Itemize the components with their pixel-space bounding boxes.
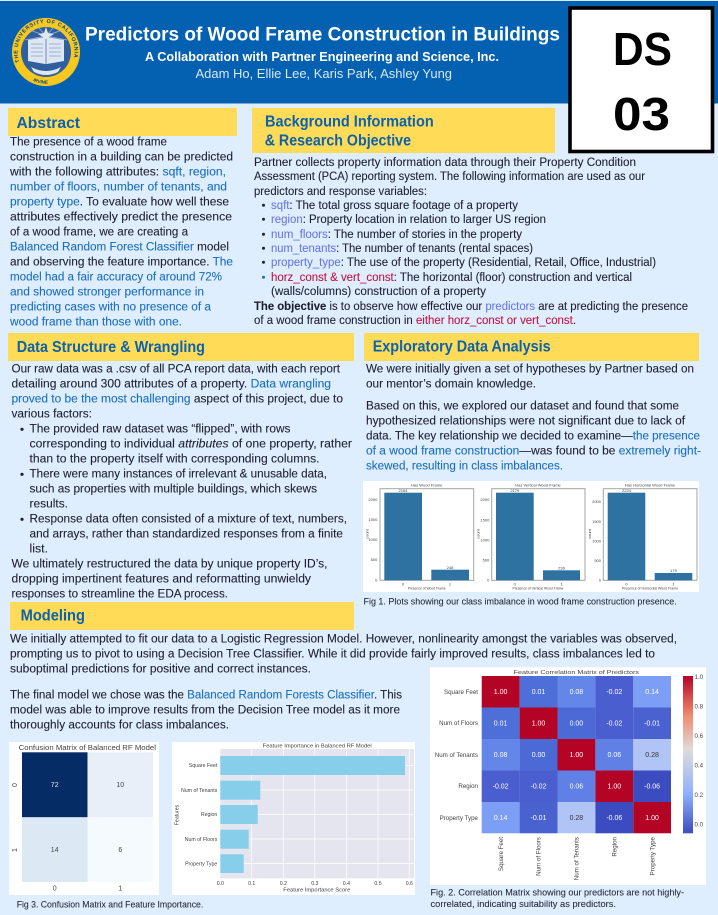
abstract text: number of floors, number of tenants, and [10,180,227,194]
chart: confusion matrix: 10 [116,782,124,789]
caption: figure 2 [430,888,684,909]
heatmap colorbar: 0.0 [694,822,704,828]
heatmap values: -0.02 [606,689,622,696]
chart: feature importance: Property Type [185,862,217,868]
abstract text: and showed stronger performance in [10,285,204,299]
bar chart: has horizontal wood frame: 500 [594,558,602,563]
wrangling text: various factors: [12,407,92,421]
bar chart: has vertical wood frame: 0 [514,582,517,586]
abstract text: construction in a building can be predicted [10,150,233,164]
modeling text: model was able to improve results from the Decision Tree model as it more [10,702,400,716]
bar chart: has wood frame: Has Wood Frame [411,482,443,488]
heatmap row labels: Region [458,783,479,790]
eda text: our mentor’s domain knowledge. [366,377,536,391]
heatmap values: 0.08 [494,752,508,759]
caption: figure 2: Fig. 2. Correlation Matrix showing our predictors are not highly- [430,888,684,898]
chart: feature importance: Feature Importance in Balanced RF Model [263,744,372,750]
variable list: sqft: The total gross square footage of a property [271,198,519,212]
authors: Adam Ho, Ellie Lee, Karis Park, Ashley Yung [196,66,452,81]
heatmap column labels: Num of Floors [536,837,543,876]
variable list [262,198,656,298]
bar chart: has wood frame: 1000 [368,537,378,542]
wrangling text: Our raw data was a .csv of all PCA report data, with each report [12,362,341,376]
abstract text: predicting cases with no presence of a [10,300,211,314]
eda text: hypothesized relationships were not significant due to lack of [366,414,686,428]
wrangling text: than to the property itself with corresponding columns. [30,452,320,466]
heatmap column labels: Region [612,836,618,857]
heading: background: Background Information [265,114,434,131]
subtitle: A Collaboration with Partner Engineering and Science, Inc. [145,50,499,64]
chart: confusion matrix: 14 [51,847,59,854]
wrangling text: detailing around 300 attributes of a property. Data wrangling [12,377,331,391]
heatmap cells [482,676,671,833]
panel: data structure and wrangling [8,333,354,601]
wrangling text: The provided raw dataset was “flipped”, with rows [30,422,290,436]
bar chart: has horizontal wood frame: count [587,528,592,539]
icon: university seal: THE UNIVERSITY OF CALIFORNIA [14,19,78,64]
heatmap colorbar: 0.4 [694,762,704,770]
heading: abstract: Abstract [16,115,81,132]
variable list: (walls/columns) construction of a property [271,284,487,298]
modeling text: We initially attempted to fit our data to a Logistic Regression Model. However, nonlinearity amongst the variables was observed, [10,632,677,646]
wrangling text: results. [30,497,68,511]
bar chart: has horizontal wood frame: 2000 [592,499,602,504]
heatmap values: 1.00 [645,815,659,822]
heatmap row labels: Square Feet [444,689,478,696]
heatmap row labels [435,689,479,822]
chart: confusion matrix: 1 [118,886,122,892]
chart: confusion matrix: 1 [12,848,19,852]
heatmap values: 1.00 [532,721,545,728]
eda text: skewed, resulting in class imbalances. [366,458,563,472]
bar chart: has horizontal wood frame: 0 [599,578,602,582]
heatmap column labels: Num of Tenants [574,837,581,880]
bar chart: has horizontal wood frame: 179 [670,568,678,573]
heatmap values: 0.01 [494,721,508,728]
chart: feature importance: Num of Floors [185,837,218,843]
wrangling text [12,362,352,601]
bar chart: has vertical wood frame: 236 [558,566,566,570]
bar chart: has horizontal wood frame: 1500 [592,519,602,524]
wrangling text: such as properties with multiple buildings, which skews [30,482,317,496]
wrangling text: dropping impertinent features and reformatting unwieldy [12,572,312,586]
panel: exploratory data analysis [363,333,701,606]
panel: background information [252,108,688,327]
heatmap colorbar: 0.6 [694,733,704,740]
eda text: data. The key relationship we decided to examine—the presence [366,428,700,442]
bar chart: has horizontal wood frame: 0 [625,582,628,586]
bar chart: has wood frame [364,482,474,590]
wrangling text: We ultimately restructured the data by unique property ID’s, [12,557,328,571]
bar chart: has vertical wood frame: Presence of Vertical Wood Frame [512,586,564,590]
bar chart: has horizontal wood frame: 2224 [622,488,632,493]
modeling text [10,632,677,731]
chart: feature importance: 0.1 [248,881,255,887]
objective statement [254,299,688,327]
chart: confusion matrix: Confusion Matrix of Balanced RF Model [19,745,156,752]
chart: feature importance: Num of Tenants [181,788,218,794]
bar chart: has vertical wood frame: 2179 [510,488,520,493]
heatmap values: -0.06 [606,815,622,822]
icon: university seal: IRVINE [33,78,48,84]
chart: confusion matrix: 0 [12,783,19,787]
chart: feature importance: Square Feet [189,763,218,769]
background intro text: Partner collects property information data through their Property Condition [254,155,636,169]
abstract text: property type. To evaluate how well these [10,195,229,209]
heading: modeling: Modeling [21,608,85,625]
heatmap values: -0.02 [606,721,622,728]
background intro text: Assessment (PCA) reporting system. The following information are used as our [254,169,645,183]
bar chart: has horizontal wood frame: Presence of Horizontal Wood Frame [622,586,679,590]
abstract text: of a wood frame, we are creating a [10,225,188,239]
heading: eda [364,333,699,361]
heading: data structure [8,333,354,361]
bar chart: has horizontal wood frame [587,482,697,590]
heading: background: & Research Objective [265,133,411,150]
heatmap column labels: Square Feet [498,837,505,871]
heatmap values: 0.08 [570,689,583,696]
heatmap values: 0.14 [645,689,659,696]
chart: confusion matrix: 0 [53,886,57,892]
wrangling text: proved to be the most challenging aspect of this project, due to [12,392,343,406]
wrangling text: and arrays, rather than standardized responses from a finite [30,527,343,541]
wrangling text: There were many instances of irrelevant & unusable data, [30,467,327,481]
variable list: property_type: The use of the property (Residential, Retail, Office, Industrial) [271,255,656,269]
title: Predictors of Wood Frame Construction in Buildings [85,24,560,46]
chart: feature importance: 0.6 [406,881,413,887]
bar chart: has wood frame: 2000 [368,497,378,502]
heatmap values: 1.00 [494,689,508,696]
heatmap row labels: Property Type [440,815,479,822]
bar chart: has horizontal wood frame: 1 [672,582,675,586]
variable list: num_tenants: The number of tenants (rental spaces) [271,241,533,255]
chart: feature importance: Feature Importance Score [283,888,350,894]
variable list: num_floors: The number of stories in the property [271,227,523,241]
wrangling text: responses to streamline the EDA process. [12,587,228,601]
chart: feature importance: Features [174,804,180,825]
objective statement: of a wood frame construction in either horz_const or vert_const. [254,313,576,327]
bar chart: has wood frame: count [364,528,370,539]
abstract text: The presence of a wood frame [10,135,167,149]
eda text: We were initially given a set of hypotheses by Partner based on [366,362,694,376]
chart: feature importance: 0.2 [280,881,287,887]
abstract text [9,135,233,329]
modeling text: suboptimal predictions for positive and correct instances. [10,662,311,676]
bar chart: has horizontal wood frame: 1000 [592,538,602,544]
team badge: DS [613,23,672,75]
chart: feature importance: 0.4 [343,881,350,887]
caption: figure 1: Fig 1. Plots showing our class imbalance in wood frame construction presence. [364,596,677,606]
heatmap row labels: Num of Floors [439,720,478,727]
bar chart: has vertical wood frame: 1000 [480,538,490,542]
header banner [0,1,718,104]
bar chart: has wood frame: 0 [402,582,405,586]
heatmap colorbar: 0.2 [694,792,704,799]
bar chart: has wood frame: Presence of Wood Frame [408,586,446,590]
chart: feature importance: Region [201,812,217,818]
objective statement: The objective is to observe how effective our predictors are at predicting the presence [254,299,688,313]
heading: background [252,108,555,153]
heatmap column labels: Property Type [649,836,656,875]
heatmap column labels [498,836,656,880]
chart: confusion matrix: 72 [51,782,59,789]
heatmap values: -0.02 [493,784,509,791]
bar chart: has wood frame: 500 [371,557,378,562]
chart: correlation matrix heatmap: Feature Correlation Matrix of Predictors [514,670,639,676]
bar chart: has wood frame: 1 [449,582,452,586]
heatmap values: -0.01 [644,721,660,728]
team badge [570,8,712,152]
chart: class imbalance bar plots [363,481,699,592]
abstract text: model had a fair accuracy of around 72% [10,270,222,284]
eda text: Based on this, we explored our dataset and found that some [366,398,679,412]
heatmap values: 0.28 [645,752,659,759]
bar chart: has vertical wood frame: 1500 [480,518,490,522]
heatmap values: 0.00 [532,752,545,759]
modeling text: prompting us to pivot to using a Decision Tree Classifier. While it did provide fairly improved results, class imbalances led to [10,647,655,661]
heading: modeling [10,602,354,630]
heatmap values: 0.01 [532,689,545,696]
heading: eda: Exploratory Data Analysis [373,339,551,356]
abstract text: attributes effectively predict the presence [10,210,232,224]
variable list: region: Property location in relation to larger US region [271,212,546,226]
modeling text: The final model we chose was the Balanced Random Forests Classifier. This [10,687,402,701]
bar chart: has vertical wood frame [476,482,585,590]
heatmap values: -0.02 [531,784,547,791]
team badge: 03 [613,88,670,140]
variable list: horz_const & vert_const: The horizontal (floor) construction and vertical [271,270,632,284]
heatmap values: 1.00 [570,752,583,759]
wrangling text: list. [30,542,48,556]
bar chart: has horizontal wood frame: Has Horizontal Wood Frame [625,482,676,488]
heatmap values [493,689,660,822]
caption: figure 2: correlated, indicating suitability as predictors. [430,899,616,909]
abstract text: with the following attributes: sqft, region, [9,165,226,179]
chart: feature importance: 0.5 [374,881,382,887]
bar chart: has vertical wood frame: count [476,528,480,539]
heatmap values: 0.06 [570,784,583,791]
panel: abstract [8,108,237,329]
chart: confusion matrix [9,742,159,895]
bar chart: has wood frame: 2164 [399,488,408,493]
background intro text: predictors and response variables: [254,184,427,198]
modeling text: thoroughly accounts for class imbalances. [10,717,229,731]
abstract text: Balanced Random Forest Classifier model [10,240,229,254]
bar chart: has vertical wood frame: 2000 [480,497,490,502]
icon: university seal [12,18,80,86]
bar chart: has wood frame: 0 [375,578,378,582]
background intro text [254,155,645,198]
wrangling text: corresponding to individual attributes of one property, rather [30,437,352,451]
heatmap values: 1.00 [607,784,621,791]
bar chart: has wood frame: 1500 [368,517,378,522]
heatmap values: 0.00 [570,721,583,728]
heatmap values: 0.28 [570,815,583,822]
heatmap values: -0.01 [531,815,547,822]
caption: figure 3: Fig 3. Confusion Matrix and Feature Importance. [17,900,203,910]
chart: feature importance: 0.3 [311,881,319,887]
heatmap colorbar: 1.0 [694,674,704,681]
heatmap values: 0.14 [494,815,508,822]
heading: abstract [8,108,237,136]
abstract text: wood frame than those with one. [9,315,182,329]
heatmap colorbar: 0.8 [694,704,704,710]
heading: data structure: Data Structure & Wrangling [17,339,205,356]
abstract text: and observing the feature importance. The [10,255,233,269]
chart: confusion matrix: 6 [118,847,122,854]
heatmap colorbar [683,674,704,833]
bar chart: has vertical wood frame: 1 [560,582,563,586]
panel: modeling [9,602,706,910]
heatmap values: -0.06 [644,784,660,791]
heatmap row labels: Num of Tenants [435,752,478,759]
eda text: of a wood frame construction—was found to be extremely right- [366,444,701,458]
chart: feature importance [172,742,415,895]
heatmap values: 0.06 [607,752,621,759]
bar chart: has vertical wood frame: 0 [487,578,490,582]
bar chart: has vertical wood frame: 500 [483,558,490,562]
eda text [366,362,701,472]
wrangling text: Response data often consisted of a mixture of text, numbers, [30,512,347,526]
chart: feature importance: 0.0 [217,881,224,887]
chart: correlation matrix heatmap [430,667,706,885]
bar chart: has wood frame: 248 [447,565,454,570]
bar chart: has vertical wood frame: Has Vertical Wood Frame [515,482,562,488]
